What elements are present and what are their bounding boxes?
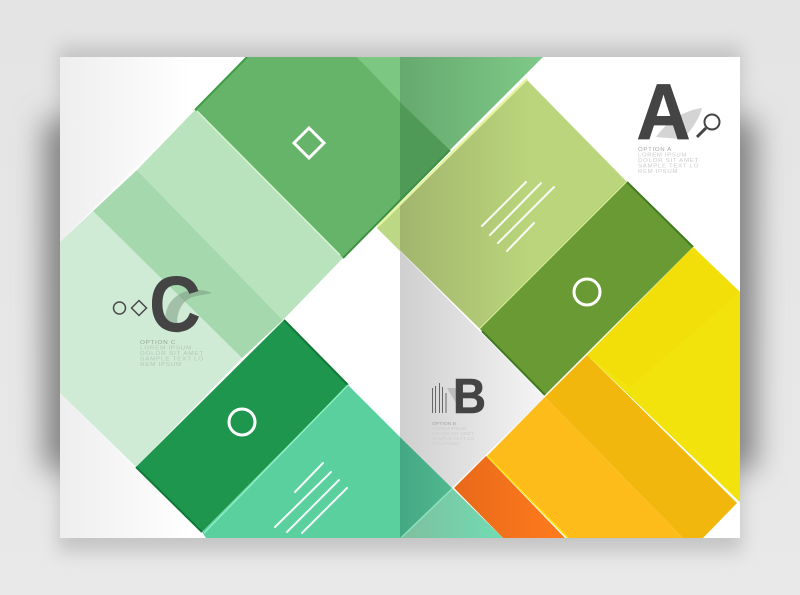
text block: option B: SAMPLE TEXT LO xyxy=(432,436,475,441)
panel: left white shading xyxy=(60,57,128,538)
panel: dark olive square with circle xyxy=(480,182,693,395)
text block: option A xyxy=(638,147,699,175)
icon: diamond xyxy=(132,300,146,316)
letter shadow A xyxy=(656,108,702,139)
panel: orange band xyxy=(454,456,565,538)
text block: option B xyxy=(432,421,475,446)
text block: option A: REM IPSUM xyxy=(638,169,678,175)
panel: green square with diamond xyxy=(195,57,450,258)
text block: option A: DOLOR SIT AMET xyxy=(638,158,699,164)
option B block xyxy=(432,370,486,446)
text block: option C: REM IPSUM xyxy=(140,362,182,368)
text block: option C: OPTION C xyxy=(140,340,176,346)
text block: option A: SAMPLE TEXT LO xyxy=(638,164,699,170)
text block: option C xyxy=(140,340,204,368)
text block: option C: LOREM IPSUM xyxy=(140,346,192,352)
icon: text lines xyxy=(482,182,554,251)
text block: option A: OPTION A xyxy=(638,147,672,153)
panel: yellow and amber bands xyxy=(487,247,745,538)
option A block xyxy=(636,67,720,175)
text block: option C: SAMPLE TEXT LO xyxy=(140,356,204,362)
text block: option B: LOREM IPSUM xyxy=(432,426,466,431)
text block: option B: DOLOR SIT AMET xyxy=(432,431,474,436)
page sheet xyxy=(60,57,740,538)
panel: dark green square with circle xyxy=(136,320,348,532)
text block: option C: DOLOR SIT AMET xyxy=(140,351,204,357)
panel: top translucent band xyxy=(357,57,543,150)
icon: magnifier xyxy=(697,114,720,137)
icon: vertical bars xyxy=(432,383,446,413)
icon: diamond xyxy=(294,128,324,158)
heading: B: B xyxy=(453,370,486,424)
panel: pale green option C xyxy=(60,110,343,467)
icon: circle xyxy=(574,279,600,305)
text block: option A: LOREM IPSUM xyxy=(638,152,687,158)
text block: option B: OPTION B xyxy=(432,421,456,426)
brochure artwork xyxy=(60,57,745,538)
icon: text lines xyxy=(275,463,347,533)
text block: option B: REM IPSUM xyxy=(432,441,459,446)
letter shadow C xyxy=(165,290,212,333)
icon: circle xyxy=(114,302,126,314)
heading: A: A xyxy=(636,67,690,156)
panel: centre grey fold xyxy=(400,251,545,488)
panel: mint square with lines xyxy=(202,385,503,538)
panel: olive square with lines xyxy=(343,79,627,329)
page shadow xyxy=(44,46,756,552)
heading: C: C xyxy=(149,259,201,348)
icon: circle xyxy=(229,409,255,435)
letter shadow B xyxy=(447,388,462,413)
option C block xyxy=(114,259,212,368)
